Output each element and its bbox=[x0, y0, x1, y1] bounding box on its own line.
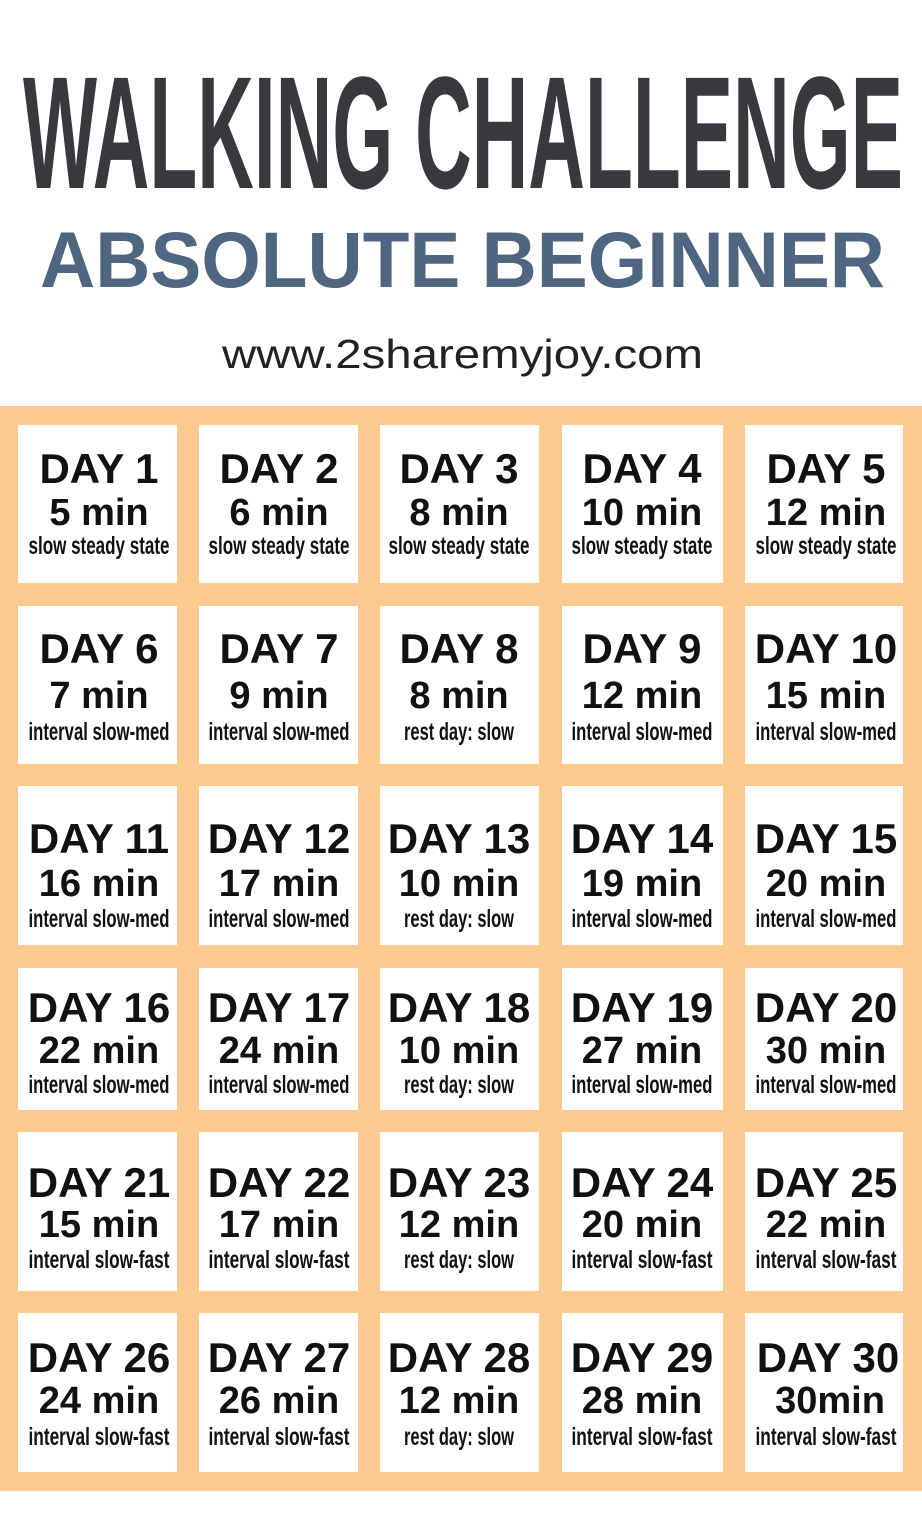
card: day 7 bbox=[199, 606, 358, 764]
card: day 16: interval slow-med bbox=[28, 1071, 170, 1099]
card: day 13: DAY 13 bbox=[388, 815, 530, 862]
card: day 1: 5 min bbox=[49, 492, 149, 534]
card: day 16: 22 min bbox=[39, 1030, 159, 1072]
card: day 4: 10 min bbox=[582, 492, 702, 534]
card: day 4 bbox=[562, 425, 723, 583]
row 1 bbox=[18, 425, 903, 583]
card: day 8: rest day: slow bbox=[404, 718, 514, 746]
card: day 11 bbox=[18, 786, 177, 945]
card: day 29: interval slow-fast bbox=[572, 1423, 713, 1451]
card: day 13 bbox=[380, 786, 539, 945]
card: day 5: 12 min bbox=[766, 492, 886, 534]
card: day 26 bbox=[18, 1313, 177, 1472]
card: day 21: 15 min bbox=[39, 1204, 159, 1246]
card: day 10: 15 min bbox=[766, 675, 886, 717]
card: day 6 bbox=[18, 606, 177, 764]
card: day 26: DAY 26 bbox=[28, 1334, 170, 1381]
card: day 23: 12 min bbox=[399, 1204, 519, 1246]
card: day 12: DAY 12 bbox=[208, 815, 350, 862]
card: day 18: rest day: slow bbox=[404, 1071, 514, 1099]
card: day 17: interval slow-med bbox=[208, 1071, 350, 1099]
card: day 10: DAY 10 bbox=[755, 625, 897, 672]
card: day 22 bbox=[199, 1132, 358, 1291]
card: day 24: DAY 24 bbox=[571, 1159, 714, 1206]
card: day 19: 27 min bbox=[582, 1030, 702, 1072]
card: day 26: 24 min bbox=[39, 1380, 159, 1422]
card: day 9: interval slow-med bbox=[572, 718, 712, 746]
row 3 bbox=[18, 786, 903, 945]
card: day 2: 6 min bbox=[229, 492, 329, 534]
card: day 25: DAY 25 bbox=[755, 1159, 897, 1206]
card: day 19: interval slow-med bbox=[572, 1071, 712, 1099]
card: day 4: slow steady state bbox=[572, 532, 713, 560]
card: day 30: DAY 30 bbox=[757, 1334, 899, 1381]
card: day 18: DAY 18 bbox=[388, 984, 530, 1031]
card: day 6: DAY 6 bbox=[39, 625, 159, 672]
card: day 3 bbox=[380, 425, 539, 583]
card: day 2: slow steady state bbox=[208, 532, 350, 560]
card: day 22: DAY 22 bbox=[208, 1159, 350, 1206]
card: day 28: 12 min bbox=[399, 1380, 519, 1422]
card: day 29 bbox=[562, 1313, 723, 1472]
card: day 20: 30 min bbox=[766, 1030, 886, 1072]
website url: www.2sharemyjoy.com bbox=[221, 331, 703, 377]
card: day 8: 8 min bbox=[409, 675, 509, 717]
card: day 21: DAY 21 bbox=[28, 1159, 170, 1206]
card: day 12 bbox=[199, 786, 358, 945]
card: day 6: interval slow-med bbox=[28, 718, 170, 746]
card: day 8: DAY 8 bbox=[399, 625, 519, 672]
card: day 17: 24 min bbox=[219, 1030, 339, 1072]
card: day 28: rest day: slow bbox=[404, 1423, 514, 1451]
card: day 25 bbox=[745, 1132, 903, 1291]
card: day 30 bbox=[745, 1313, 903, 1472]
row 4 bbox=[18, 968, 903, 1110]
card: day 1 bbox=[18, 425, 177, 583]
card: day 2: DAY 2 bbox=[219, 445, 339, 492]
card: day 12: 17 min bbox=[219, 863, 339, 905]
card: day 7: 9 min bbox=[229, 675, 329, 717]
card: day 27: 26 min bbox=[219, 1380, 339, 1422]
card: day 14: DAY 14 bbox=[571, 815, 714, 862]
card: day 18 bbox=[380, 968, 539, 1110]
card: day 23: DAY 23 bbox=[388, 1159, 530, 1206]
card: day 16: DAY 16 bbox=[28, 984, 170, 1031]
card: day 28 bbox=[380, 1313, 539, 1472]
card: day 24: interval slow-fast bbox=[572, 1246, 713, 1274]
card: day 17 bbox=[199, 968, 358, 1110]
card: day 1: DAY 1 bbox=[39, 445, 159, 492]
card: day 27: interval slow-fast bbox=[208, 1423, 350, 1451]
card: day 14: 19 min bbox=[582, 863, 702, 905]
row 6 bbox=[18, 1313, 903, 1472]
card: day 11: 16 min bbox=[39, 863, 159, 905]
card: day 2 bbox=[199, 425, 358, 583]
card: day 11: DAY 11 bbox=[29, 815, 169, 862]
card: day 21: interval slow-fast bbox=[28, 1246, 170, 1274]
card: day 5: DAY 5 bbox=[766, 445, 886, 492]
row 2 bbox=[18, 606, 903, 764]
card: day 19: DAY 19 bbox=[571, 984, 713, 1031]
card: day 28: DAY 28 bbox=[388, 1334, 530, 1381]
row 5 bbox=[18, 1132, 903, 1291]
card: day 15 bbox=[745, 786, 903, 945]
card: day 14: interval slow-med bbox=[572, 905, 712, 933]
card: day 9: DAY 9 bbox=[582, 625, 702, 672]
card: day 29: 28 min bbox=[582, 1380, 702, 1422]
card: day 9: 12 min bbox=[582, 675, 702, 717]
card: day 21 bbox=[18, 1132, 177, 1291]
card: day 3: DAY 3 bbox=[399, 445, 519, 492]
card: day 23 bbox=[380, 1132, 539, 1291]
card: day 25: 22 min bbox=[766, 1204, 886, 1246]
card: day 11: interval slow-med bbox=[28, 905, 170, 933]
panel: calendar grid bbox=[0, 406, 922, 1491]
card: day 24: 20 min bbox=[582, 1204, 702, 1246]
card: day 4: DAY 4 bbox=[582, 445, 702, 492]
card: day 15: DAY 15 bbox=[755, 815, 897, 862]
card: day 3: 8 min bbox=[409, 492, 509, 534]
card: day 16 bbox=[18, 968, 177, 1110]
card: day 3: slow steady state bbox=[388, 532, 530, 560]
card: day 22: 17 min bbox=[219, 1204, 339, 1246]
card: day 29: DAY 29 bbox=[571, 1334, 713, 1381]
card: day 24 bbox=[562, 1132, 723, 1291]
card: day 14 bbox=[562, 786, 723, 945]
card: day 20: DAY 20 bbox=[755, 984, 897, 1031]
card: day 13: rest day: slow bbox=[404, 905, 514, 933]
card: day 27: DAY 27 bbox=[208, 1334, 350, 1381]
card: day 18: 10 min bbox=[399, 1030, 519, 1072]
card: day 30: 30min bbox=[775, 1380, 885, 1422]
card: day 17: DAY 17 bbox=[208, 984, 350, 1031]
card: day 12: interval slow-med bbox=[208, 905, 350, 933]
subtitle: ABSOLUTE BEGINNER bbox=[40, 215, 885, 304]
card: day 13: 10 min bbox=[399, 863, 519, 905]
card: day 27 bbox=[199, 1313, 358, 1472]
card: day 7: DAY 7 bbox=[219, 625, 339, 672]
card: day 23: rest day: slow bbox=[404, 1246, 514, 1274]
card: day 26: interval slow-fast bbox=[28, 1423, 170, 1451]
card: day 15: 20 min bbox=[766, 863, 886, 905]
card: day 9 bbox=[562, 606, 723, 764]
card: day 20 bbox=[745, 968, 903, 1110]
card: day 22: interval slow-fast bbox=[208, 1246, 350, 1274]
card: day 19 bbox=[562, 968, 723, 1110]
card: day 6: 7 min bbox=[49, 675, 149, 717]
card: day 1: slow steady state bbox=[28, 532, 170, 560]
card: day 5 bbox=[745, 425, 903, 583]
card: day 8 bbox=[380, 606, 539, 764]
card: day 10 bbox=[745, 606, 903, 764]
card: day 7: interval slow-med bbox=[208, 718, 350, 746]
